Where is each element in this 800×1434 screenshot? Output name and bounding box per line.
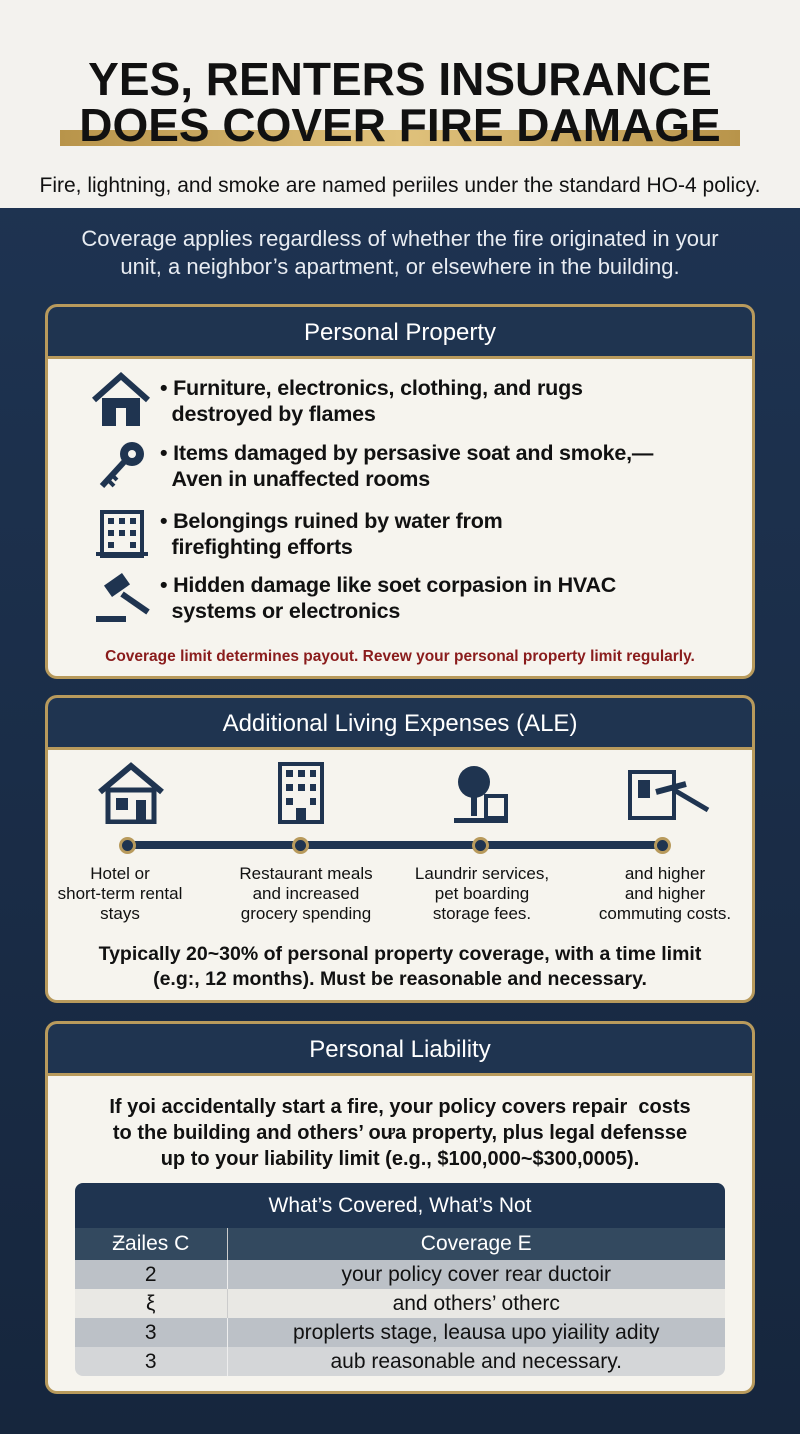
icon: house ALE (98, 762, 164, 824)
item 3: • Belongings ruined by water from (160, 509, 503, 533)
table: Ƶailes C (112, 1232, 189, 1255)
ALE note: Typically 20~30% of personal property coverage, with a time limit (99, 943, 701, 965)
icon: building (96, 510, 148, 558)
liability text: to the building and others’ oưa property, plus legal defensse (113, 1122, 687, 1144)
text: Laundrir services, (415, 864, 549, 883)
text: Restaurant meals (239, 864, 373, 883)
liability text: up to your liability limit (e.g., $100,000~$300,0005). (161, 1148, 639, 1170)
item 3: firefighting efforts (172, 535, 353, 559)
liability text: If yoi accidentally start a fire, your policy covers repair costs (109, 1096, 691, 1118)
heading (48, 307, 752, 359)
title: YES, RENTERS INSURANCE (88, 53, 712, 105)
item 3 (160, 509, 503, 559)
panel: personal property (45, 304, 755, 679)
panel: personal liability (45, 1021, 755, 1394)
table: 3 (145, 1320, 157, 1344)
icon: tree/park (454, 766, 508, 823)
heading: Personal Property (304, 319, 496, 346)
title: DOES COVER FIRE DAMAGE (79, 99, 721, 151)
item 2: • Items damaged by persasive soat and smoke,— (160, 441, 653, 465)
timeline labels: stays (100, 904, 140, 923)
icon: gavel (96, 573, 150, 622)
intro paragraph (81, 226, 719, 279)
red note: Coverage limit determines payout. Revew your personal property limit regularly. (105, 648, 695, 665)
top header area (0, 0, 800, 208)
heading: Personal Liability (309, 1036, 491, 1063)
table: and others’ otherc (393, 1292, 560, 1314)
intro paragraph: Coverage applies regardless of whether the fire originated in your (81, 226, 719, 251)
table: aub reasonable and necessary. (330, 1350, 622, 1372)
liability text (109, 1096, 691, 1170)
ALE note: (e.g:, 12 months). Must be reasonable and necessary. (153, 968, 647, 990)
table: ξ (146, 1292, 155, 1314)
panel: ALE (45, 695, 755, 1003)
text: storage fees. (433, 904, 531, 923)
text: grocery spending (241, 904, 371, 923)
item 2 (160, 441, 654, 491)
heading (48, 698, 752, 750)
table: your policy cover rear ductoir (341, 1262, 611, 1286)
table: proplerts stage, leausa upo yiaility adity (293, 1320, 660, 1344)
heading: Additional Living Expenses (ALE) (223, 710, 577, 737)
icon: house (92, 372, 150, 426)
table: What’s Covered, What’s Not (268, 1194, 532, 1217)
text: and increased (253, 884, 359, 903)
icon: gavel sign (628, 770, 710, 820)
timeline (127, 841, 663, 849)
text: and higher (625, 884, 705, 903)
table (75, 1183, 725, 1376)
item 1: • Furniture, electronics, clothing, and rugs (160, 376, 583, 400)
table: Coverage E (421, 1232, 532, 1255)
timeline labels: Hotel or (90, 864, 150, 883)
text: and higher (625, 864, 705, 883)
timeline labels (58, 864, 182, 923)
item 1 (160, 376, 583, 426)
text: commuting costs. (599, 904, 731, 923)
item 2: Aven in unaffected rooms (172, 467, 430, 491)
text: pet boarding (435, 884, 529, 903)
subtitle: Fire, lightning, and smoke are named periiles under the standard HO-4 policy. (40, 174, 760, 197)
timeline labels: short-term rental (58, 884, 182, 903)
item 4: • Hidden damage like soet corpasion in HVAC (160, 573, 616, 597)
ALE note (98, 943, 702, 990)
item 4 (160, 573, 616, 623)
item 1: destroyed by flames (172, 402, 376, 426)
item 4: systems or electronics (172, 599, 400, 623)
table: 3 (145, 1350, 157, 1372)
table: 2 (145, 1262, 157, 1286)
icon: building ALE (278, 762, 324, 824)
title underline gold (60, 130, 740, 146)
intro paragraph: unit, a neighbor’s apartment, or elsewhere in the building. (120, 254, 680, 279)
icon: key (100, 442, 144, 488)
title (79, 53, 721, 151)
heading (48, 1024, 752, 1076)
